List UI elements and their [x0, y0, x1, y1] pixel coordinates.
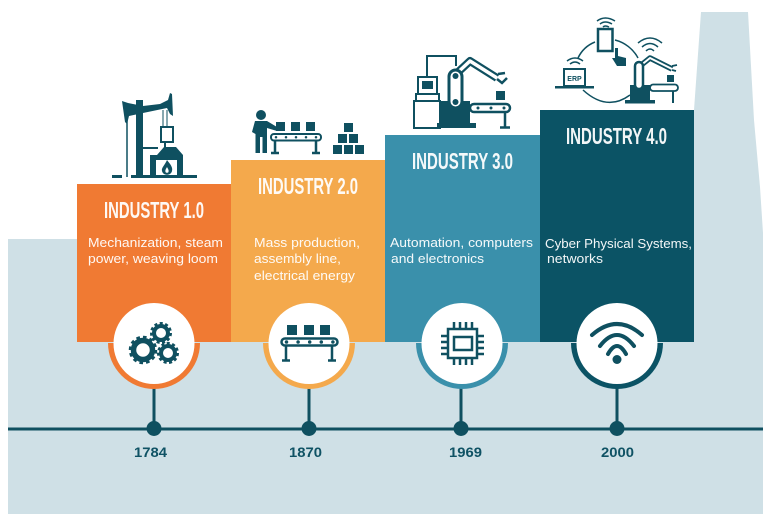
label: ERP: ERP [567, 76, 582, 83]
panel: Industry 4.0 [540, 110, 694, 342]
year: 1784: 1784 [134, 445, 168, 460]
milestone 1969 [416, 303, 508, 460]
panel: Industry 3.0 [385, 135, 540, 342]
icon: connected ERP, tablet and robot [555, 18, 678, 104]
icon: gears [130, 324, 178, 362]
icon: wifi [592, 324, 642, 364]
heading: Industry 3.0: INDUSTRY 3.0 [412, 148, 513, 174]
icon: computer and robot arm [414, 56, 510, 128]
panel: Industry 2.0 [231, 160, 386, 342]
text: Industry 3.0 description: and electronics [391, 251, 484, 266]
year: 1870: 1870 [289, 445, 322, 460]
heading: Industry 4.0: INDUSTRY 4.0 [566, 123, 667, 149]
icon: worker with conveyor and boxes [252, 110, 364, 154]
text: Industry 4.0 description: networks [547, 251, 603, 266]
text: Industry 4.0 description: Cyber Physical Systems, [545, 236, 692, 251]
text: Industry 2.0 description: assembly line, [254, 251, 341, 266]
icon: conveyor belt [282, 325, 338, 360]
text: Industry 2.0 description: electrical energy [254, 268, 356, 283]
year: 1969: 1969 [449, 445, 482, 460]
heading: Industry 2.0: INDUSTRY 2.0 [258, 173, 358, 199]
icon: steam engine [112, 93, 197, 177]
text: Industry 3.0 description: Automation, computers [390, 235, 533, 250]
text: Industry 1.0 description: Mechanization, steam [88, 235, 223, 250]
milestone 1784 [108, 303, 200, 460]
panel: Industry 1.0 [77, 184, 232, 342]
text: Industry 1.0 description: power, weaving loom [88, 251, 218, 266]
icon: microchip [441, 322, 484, 365]
milestone 2000 [571, 303, 663, 460]
milestone 1870 [263, 303, 355, 460]
timeline axis [8, 428, 763, 430]
text: Industry 2.0 description: Mass production, [254, 235, 360, 250]
heading: Industry 1.0: INDUSTRY 1.0 [104, 197, 204, 223]
year: 2000: 2000 [601, 445, 634, 460]
